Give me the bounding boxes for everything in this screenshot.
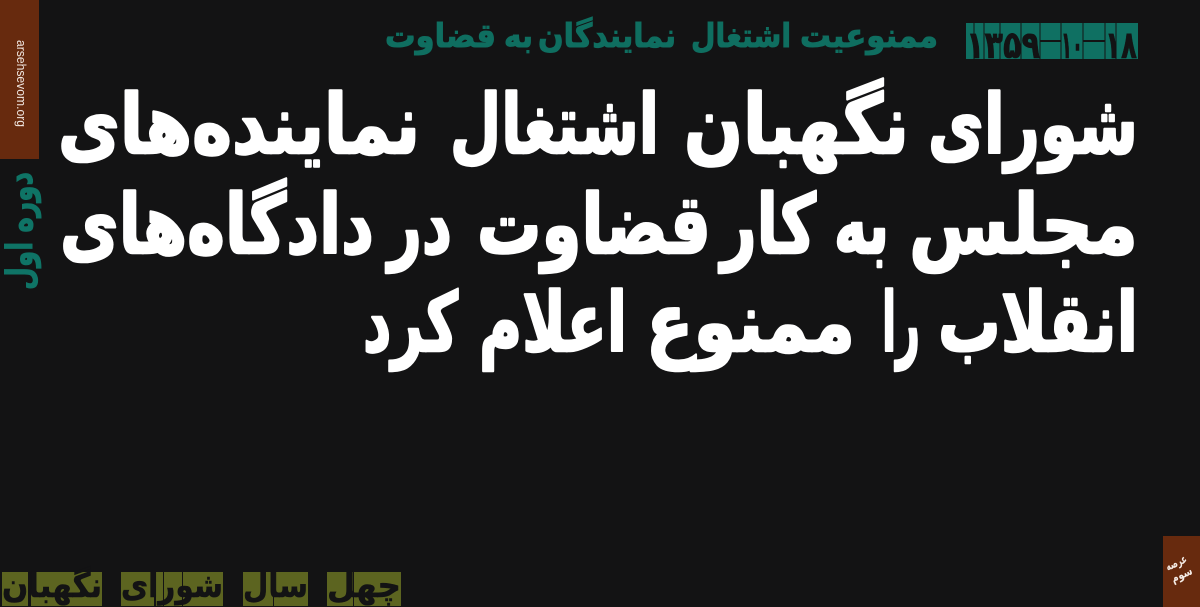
subtitle: نمایندگان (538, 16, 676, 55)
headline line 3: انقلاب (938, 276, 1138, 371)
panel: site tab (0, 0, 39, 159)
footer strip: سال (243, 566, 308, 606)
headline line 2: قضاوت (477, 178, 711, 274)
subtitle: قضاوت (385, 16, 496, 56)
logo mark: سوم (1169, 563, 1195, 586)
headline line 3: اعلام (479, 276, 627, 371)
headline line 2 (60, 178, 1138, 274)
headline line 2: به (834, 178, 889, 273)
logo mark: عرصه (1163, 552, 1189, 574)
headline line 1: نگهبان (684, 78, 909, 173)
logo mark (1163, 552, 1195, 586)
footer strip: شورای (121, 566, 223, 606)
headline line 1: نماینده‌های (58, 78, 420, 173)
date day: ۱۸ (1105, 23, 1137, 67)
headline line 3: ممنوع (646, 276, 855, 371)
logo tab (1163, 536, 1200, 607)
subtitle: اشتغال (691, 16, 791, 55)
headline line 1: اشتغال (450, 78, 659, 173)
footer strip: چهل (327, 566, 401, 606)
date year: ۱۳۵۹ (966, 23, 1040, 67)
site url: arsehsevom.org (14, 40, 28, 127)
headline line 3: را (882, 276, 920, 371)
footer strip: نگهبان (2, 566, 102, 606)
footer strip (2, 566, 401, 606)
headline line 3 (363, 276, 1138, 371)
period label: دوره اول (0, 172, 41, 290)
date strip (966, 23, 1138, 67)
headline line 1 (58, 78, 1138, 173)
headline line 2: کار (718, 178, 816, 273)
date strip: ۱۰ (1061, 23, 1083, 67)
subtitle: به (504, 16, 533, 55)
headline line 3: کرد (363, 276, 458, 371)
subtitle: ممنوعیت (800, 16, 938, 56)
headline (58, 78, 1138, 371)
headline line 2: در (385, 178, 452, 273)
headline line 2: دادگاه‌های (60, 178, 374, 273)
subtitle (385, 16, 938, 56)
headline line 2: مجلس (909, 178, 1138, 273)
